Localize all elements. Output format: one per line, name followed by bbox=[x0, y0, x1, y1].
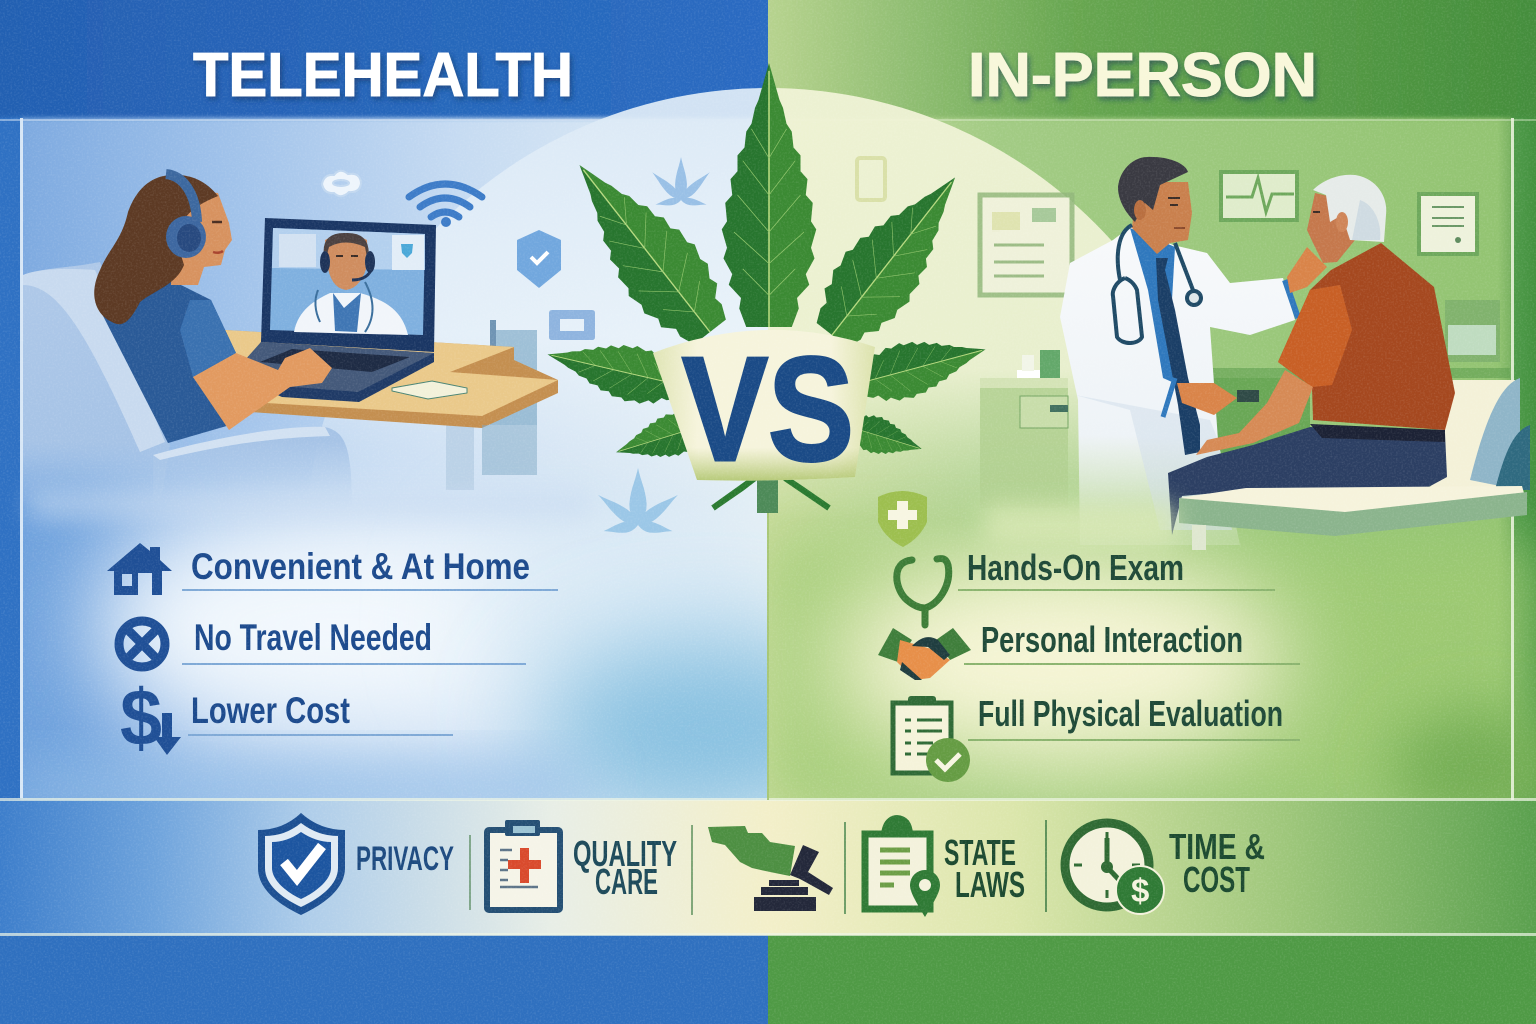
icon: lower cost: $ bbox=[120, 673, 162, 762]
desk bbox=[225, 320, 558, 490]
text: hands-on: Hands-On Exam bbox=[967, 547, 1184, 588]
text: time and cost: COST bbox=[1183, 859, 1250, 900]
icon: handshake bbox=[878, 628, 971, 680]
icon: faint leaf lower bbox=[594, 468, 682, 536]
doctor hands bbox=[1163, 280, 1298, 417]
clinic wall items bbox=[980, 172, 1510, 508]
illustration: woman on video call bbox=[23, 174, 558, 510]
title: telehealth: TELEHEALTH bbox=[193, 41, 573, 110]
VS badge bbox=[653, 327, 875, 492]
text: state laws: LAWS bbox=[955, 864, 1025, 905]
laptop screen bbox=[261, 218, 436, 352]
notebook bbox=[392, 381, 467, 399]
title: in-person: IN-PERSON bbox=[968, 41, 1317, 110]
belt bbox=[1310, 424, 1445, 442]
illustration: cannabis leaf bbox=[541, 63, 993, 513]
bottom footer strips bbox=[0, 798, 1536, 1024]
glow arc left of leaf bbox=[322, 88, 762, 466]
doctor neck and head bbox=[1118, 157, 1192, 254]
laptop base bbox=[236, 342, 434, 402]
list: in-person benefits bbox=[878, 491, 1300, 782]
icon: wifi bbox=[409, 184, 482, 227]
lower fade of telehealth scene bbox=[30, 492, 590, 518]
VS lettering: VS bbox=[682, 327, 854, 492]
icon: faint leaf top bbox=[649, 157, 713, 208]
exam bed back bbox=[1430, 378, 1530, 490]
stem line bbox=[767, 490, 769, 800]
exam table bbox=[1179, 486, 1527, 550]
torso bbox=[100, 280, 236, 443]
icon: shield plus bbox=[878, 491, 927, 547]
text: personal interaction: Personal Interaction bbox=[981, 619, 1243, 660]
icon: clock and dollar: $ bbox=[1131, 872, 1149, 909]
bottom factor row bbox=[258, 813, 1265, 917]
doctor coat bbox=[1060, 227, 1295, 545]
icon: cloud bbox=[322, 171, 361, 196]
headphones bbox=[166, 174, 206, 258]
text: privacy: PRIVACY bbox=[356, 840, 454, 878]
text: quality care: QUALITY bbox=[573, 833, 677, 874]
patient face and hair bbox=[1307, 175, 1386, 263]
lower fade of in-person scene bbox=[985, 505, 1175, 545]
patient arm bbox=[1196, 370, 1313, 455]
text: quality care bbox=[573, 833, 677, 902]
text: no travel: No Travel Needed bbox=[194, 617, 432, 658]
shirt and tie bbox=[1130, 228, 1200, 455]
text: quality care: CARE bbox=[595, 861, 658, 902]
neck and face bbox=[171, 190, 232, 285]
text: time and cost: TIME & bbox=[1169, 826, 1265, 867]
panel: in-person background bbox=[768, 0, 1536, 800]
patient shirt bbox=[1278, 243, 1455, 430]
text: time and cost bbox=[1169, 826, 1265, 900]
stethoscope bbox=[1113, 225, 1201, 343]
doctor hand on patient's face bbox=[1287, 247, 1327, 293]
icon: state map and gavel bbox=[708, 826, 833, 911]
icon: clock and dollar bbox=[1065, 823, 1164, 914]
icon: quality clipboard bbox=[487, 820, 560, 910]
panel: telehealth background bbox=[0, 0, 768, 800]
glow arc right of leaf bbox=[768, 88, 1112, 502]
icon: stethoscope bbox=[897, 559, 949, 625]
sleeve highlight bbox=[180, 300, 236, 377]
illustration: doctor examining patient bbox=[980, 157, 1530, 550]
icon: shield check bbox=[517, 230, 561, 288]
text: full physical evaluation: Full Physical Evaluation bbox=[978, 693, 1283, 734]
coat shading bbox=[1075, 395, 1232, 530]
icon: state laws clipboard and pin bbox=[865, 815, 940, 917]
list: telehealth benefits bbox=[107, 543, 558, 762]
text: state laws: STATE bbox=[944, 832, 1016, 873]
arm and hand bbox=[193, 348, 332, 430]
faint square icon bbox=[992, 212, 1000, 232]
icon: clipboard check bbox=[893, 696, 970, 782]
faint device icon bbox=[549, 310, 595, 340]
icon: privacy shield bbox=[258, 813, 345, 915]
text: lower cost: Lower Cost bbox=[191, 690, 350, 731]
screen doctor bbox=[294, 293, 408, 335]
text: convenient: Convenient & At Home bbox=[191, 546, 530, 587]
shirt sleeve highlight bbox=[1278, 285, 1352, 387]
patient trousers bbox=[1168, 427, 1447, 535]
hair bbox=[94, 175, 218, 324]
text: state laws bbox=[944, 832, 1025, 905]
chair bbox=[23, 262, 352, 510]
faint phone icon bbox=[857, 158, 885, 200]
icon: no travel bbox=[119, 621, 165, 667]
icon: house bbox=[107, 543, 172, 595]
